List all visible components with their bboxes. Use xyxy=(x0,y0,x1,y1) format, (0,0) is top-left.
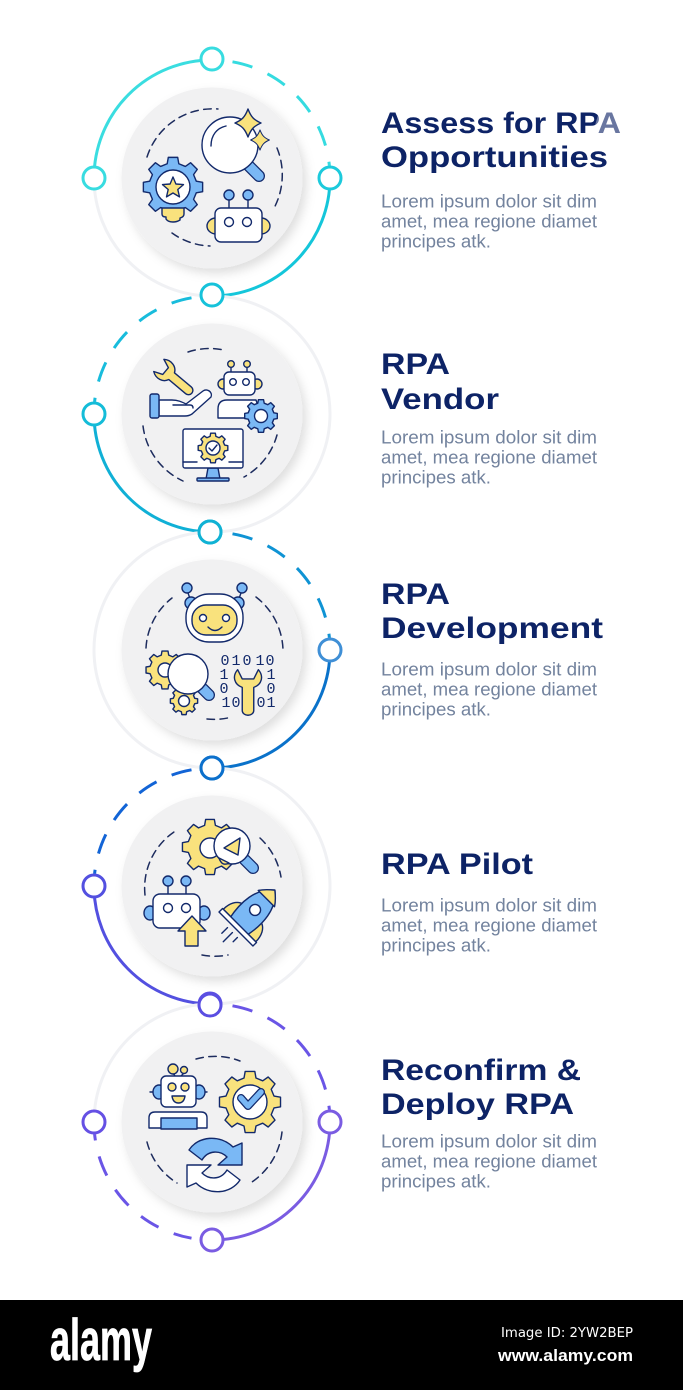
watermark fade over heading xyxy=(592,108,622,136)
icon: binary code with wrench: 1 xyxy=(266,695,276,712)
icon: binary code with wrench: 0 xyxy=(242,653,252,670)
icon: binary code with wrench xyxy=(219,653,276,715)
body text 3: amet, mea regione diamet xyxy=(381,678,597,700)
heading 5: Deploy RPA xyxy=(381,1088,574,1121)
dashed inner ring 3 xyxy=(146,597,283,719)
disc 2 xyxy=(122,324,302,504)
heading 4: RPA Pilot xyxy=(381,848,533,881)
image id: Image ID: 2YW2BEP xyxy=(501,1326,633,1341)
icon: binary code with wrench: 0 xyxy=(220,653,230,670)
ring 1 xyxy=(83,48,341,296)
icon: binary code with wrench: 0 xyxy=(265,653,275,670)
icon: binary code with wrench: 0 xyxy=(231,695,241,712)
body text 4: Lorem ipsum dolor sit dim xyxy=(381,894,597,916)
icon: binary code with wrench: 0 xyxy=(266,681,276,698)
heading 5: Reconfirm & xyxy=(381,1054,581,1087)
icon: monitor with gear xyxy=(183,429,243,481)
ring 4 xyxy=(83,757,330,1015)
heading 1: Opportunities xyxy=(381,141,608,174)
dashed inner ring 2 xyxy=(143,349,277,481)
body text 1: amet, mea regione diamet xyxy=(381,210,597,232)
ring 3 xyxy=(94,521,341,779)
body text 2: Lorem ipsum dolor sit dim xyxy=(381,426,597,448)
step 2: RPA vendor xyxy=(83,284,597,543)
body text 5: Lorem ipsum dolor sit dim xyxy=(381,1130,597,1152)
icon: magnifier with sparkles xyxy=(202,109,269,176)
icon: binary code with wrench: 1 xyxy=(255,653,265,670)
body text 3: principes atk. xyxy=(381,698,491,720)
body text 3 xyxy=(381,658,597,720)
icon: gears and magnifier xyxy=(146,651,209,715)
step 5: reconfirm and deploy RPA xyxy=(83,994,597,1251)
icon: binary code with wrench: 0 xyxy=(219,681,229,698)
body text 3: Lorem ipsum dolor sit dim xyxy=(381,658,597,680)
icon: gear with light bulb xyxy=(143,157,203,222)
icon: binary code with wrench: 1 xyxy=(231,653,241,670)
icon: robot with upload arrow xyxy=(144,876,210,946)
heading 2: Vendor xyxy=(381,383,499,416)
heading 2 xyxy=(381,348,499,416)
icon: gear with check mark xyxy=(219,1071,281,1133)
step 3: RPA development xyxy=(94,521,603,779)
icon: wrench on hand xyxy=(150,357,211,418)
heading 1: Assess for RPA xyxy=(381,107,621,140)
body text 4: principes atk. xyxy=(381,934,491,956)
heading 5 xyxy=(381,1054,581,1121)
dashed inner ring 1 xyxy=(147,109,282,246)
icon: rocket xyxy=(206,873,292,959)
dashed inner ring 5 xyxy=(147,1056,282,1183)
body text 2 xyxy=(381,426,597,488)
disc 5 xyxy=(122,1032,302,1212)
disc 1 xyxy=(122,88,302,268)
dashed inner ring 4 xyxy=(145,830,281,956)
step 4: RPA pilot xyxy=(83,757,597,1015)
body text 4: amet, mea regione diamet xyxy=(381,914,597,936)
body text 4 xyxy=(381,894,597,956)
heading 3: Development xyxy=(381,612,603,645)
body text 5 xyxy=(381,1130,597,1192)
step 1: assess for RPA opportunities xyxy=(83,48,622,296)
website: www.alamy.com xyxy=(497,1346,633,1365)
icon: binary code with wrench: 0 xyxy=(256,695,266,712)
icon: binary code with wrench: 1 xyxy=(221,695,231,712)
icon: refresh arrows xyxy=(187,1138,242,1192)
footer bar xyxy=(0,1300,683,1390)
footer logo: alamy xyxy=(50,1308,152,1373)
icon: smiling robot head xyxy=(182,583,247,642)
icon: binary code with wrench: 1 xyxy=(266,667,276,684)
ring 2 xyxy=(83,284,330,543)
body text 1: Lorem ipsum dolor sit dim xyxy=(381,190,597,212)
body text 1: principes atk. xyxy=(381,230,491,252)
icon: robot with gear xyxy=(218,361,277,432)
heading 3 xyxy=(381,578,603,645)
disc 3 xyxy=(122,560,302,740)
ring 5 xyxy=(83,994,341,1251)
heading 3: RPA xyxy=(381,578,450,611)
icon: binary code with wrench: 1 xyxy=(219,667,229,684)
body text 2: principes atk. xyxy=(381,466,491,488)
body text 5: amet, mea regione diamet xyxy=(381,1150,597,1172)
heading 2: RPA xyxy=(381,348,450,381)
heading 1 xyxy=(381,107,621,174)
body text 2: amet, mea regione diamet xyxy=(381,446,597,468)
body text 5: principes atk. xyxy=(381,1170,491,1192)
disc 4 xyxy=(122,796,302,976)
icon: robot xyxy=(207,190,270,242)
icon: happy robot xyxy=(149,1064,207,1129)
body text 1 xyxy=(381,190,597,252)
icon: gear with magnifier xyxy=(182,819,253,875)
